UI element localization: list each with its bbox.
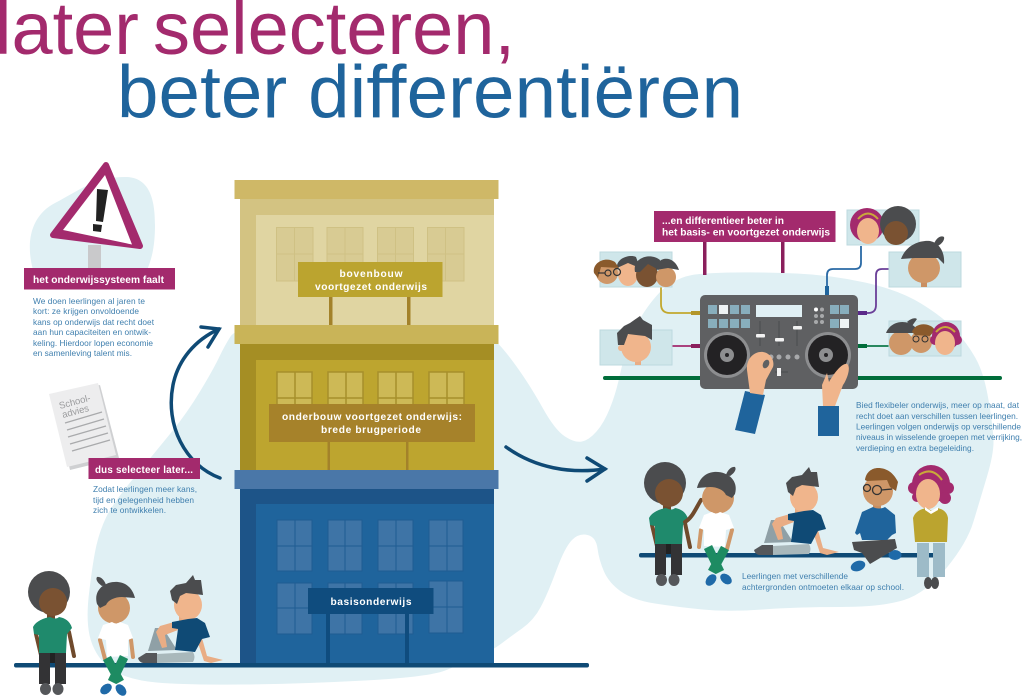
text block: systeem faalt (33, 296, 155, 358)
screen with faces: right bottom (886, 318, 962, 356)
sign: bovenbouw voortgezet onderwijs: voortgezet onderwijs (315, 282, 427, 293)
people: right group (644, 462, 954, 589)
screens with faces: left top (594, 252, 679, 287)
person: glasses (849, 468, 902, 573)
text block: dus selecteer later (93, 484, 197, 515)
person: afro (644, 462, 701, 586)
icon: schooladvies document: advies (61, 403, 91, 421)
banner: dus selecteer later: dus selecteer later... (95, 465, 193, 476)
title (0, 0, 743, 134)
green ground line: right (603, 376, 1002, 380)
text block: flexibeler onderwijs: Leerlingen volgen onderwijs op verschillende (856, 422, 1021, 432)
sign: bovenbouw voortgezet onderwijs (298, 262, 442, 297)
dj deck (691, 286, 867, 436)
banner: het onderwijssysteem faalt: het onderwijssysteem faalt (33, 275, 165, 286)
faders (760, 321, 797, 372)
icon: schooladvies document: School- (58, 393, 92, 412)
text block: flexibeler onderwijs: verdieping en extra begeleiding. (856, 443, 974, 453)
sign: onderbouw voortgezet onderwijs: brede brugperiode (321, 425, 421, 436)
sign: onderbouw voortgezet onderwijs: onderbouw voortgezet onderwijs: (282, 412, 462, 423)
text block: systeem faalt: keling. Hierdoor lopen economie (33, 338, 153, 348)
text block: systeem faalt: aan hun capaciteiten en ontwik- (33, 327, 151, 337)
left platter (704, 332, 750, 378)
sign: basisonderwijs: basisonderwijs (330, 597, 412, 608)
sign: bovenbouw voortgezet onderwijs: bovenbouw (340, 269, 403, 280)
text block: systeem faalt: We doen leerlingen al jaren te (33, 296, 145, 306)
text block: systeem faalt: kort: ze krijgen onvoldoende (33, 306, 139, 316)
school building (234, 180, 498, 664)
screen with face: left bottom (600, 316, 672, 365)
top floor: bovenbouw (234, 180, 498, 325)
caption: leerlingen ontmoeten elkaar (742, 571, 904, 592)
bench: right (639, 553, 935, 558)
text block: flexibeler onderwijs: niveaus in wisselende groepen met verrijking, (856, 432, 1022, 442)
banner: en differentieer beter: ...en differentieer beter in (662, 216, 784, 227)
deck dots (768, 308, 824, 360)
text block: flexibeler onderwijs: Bied flexibeler onderwijs, meer op maat, dat (856, 400, 1020, 410)
screen with face: right middle (889, 236, 961, 287)
person: reclining (754, 467, 839, 555)
icon: schooladvies document (49, 383, 119, 470)
middle floor: onderbouw (234, 325, 498, 470)
right hand (818, 364, 849, 436)
arrow: to the right (506, 447, 605, 481)
caption: leerlingen ontmoeten elkaar: Leerlingen met verschillende (742, 571, 848, 581)
sign: basisonderwijs (308, 588, 434, 614)
right platter (805, 332, 851, 378)
background blob: warning sign (30, 177, 155, 272)
banner: en differentieer beter: het basis- en voortgezet onderwijs (662, 228, 830, 238)
text block: flexibeler onderwijs (856, 400, 1022, 453)
ground line: left bench (14, 663, 589, 668)
ground floor: basisonderwijs (234, 470, 498, 664)
people: left group (28, 571, 223, 696)
arrow: curved up to building (171, 327, 220, 478)
person: topknot (697, 467, 736, 588)
text block: flexibeler onderwijs: recht doet aan verschillen tussen leerlingen. (856, 411, 1018, 421)
screen with faces: right top (847, 206, 919, 245)
warning sign icon (53, 165, 140, 270)
banner: en differentieer beter (654, 211, 836, 275)
deck screen (756, 305, 802, 317)
caption: leerlingen ontmoeten elkaar: achtergronden ontmoeten elkaar op school. (742, 582, 904, 592)
text block: systeem faalt: kans op onderwijs dat recht doet (33, 317, 155, 327)
banner: dus selecteer later (88, 458, 200, 479)
cables (661, 246, 889, 346)
text block: systeem faalt: en samenleving talent mis. (33, 348, 132, 358)
text block: dus selecteer later: Zodat leerlingen meer kans, (93, 484, 197, 494)
banner: het onderwijssysteem faalt (24, 268, 175, 290)
background blob: main tint (88, 272, 994, 685)
person: curly hair (908, 465, 954, 589)
deck buttons (708, 305, 849, 328)
text block: dus selecteer later: tijd en gelegenheid hebben (93, 495, 194, 505)
title: beter differentiëren (117, 50, 743, 134)
text block: dus selecteer later: zich te ontwikkelen. (93, 505, 166, 515)
left hand (735, 352, 773, 434)
sign: onderbouw voortgezet onderwijs (269, 404, 475, 442)
